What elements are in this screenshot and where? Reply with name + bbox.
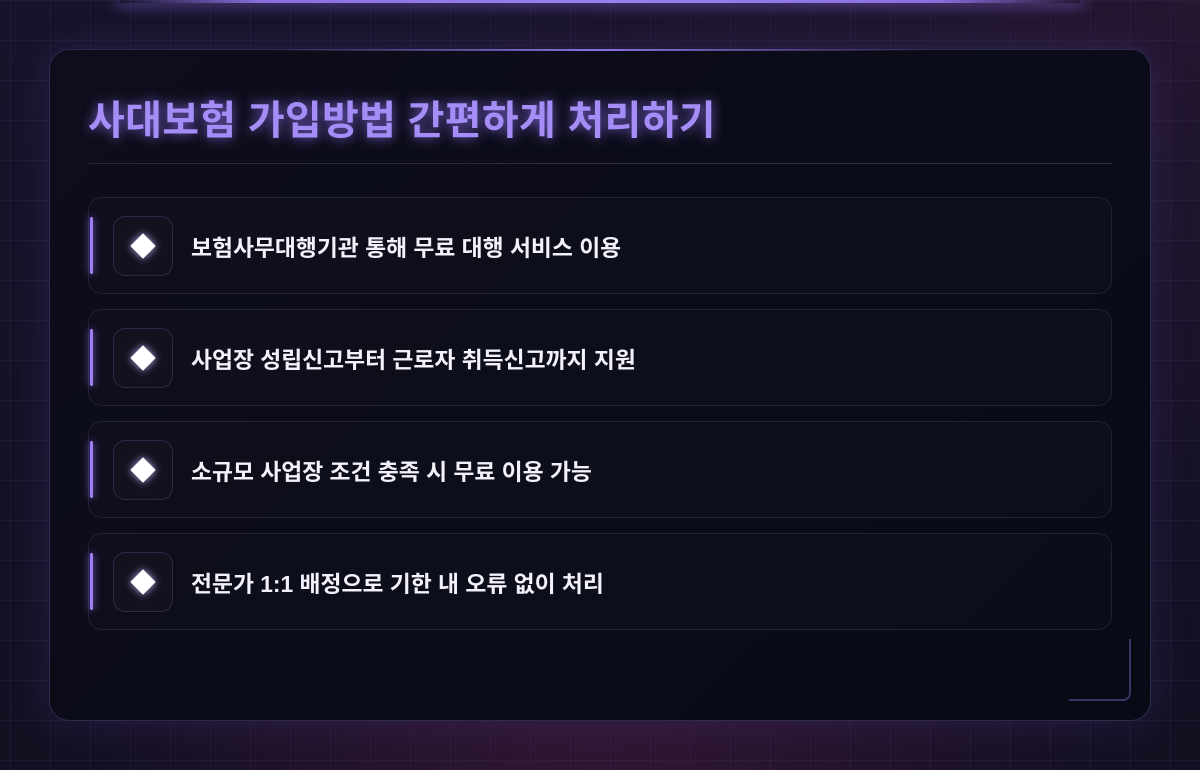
top glow line bbox=[120, 0, 1080, 3]
item 2 bbox=[88, 309, 1112, 406]
title: 사대보험 가입방법 간편하게 처리하기 bbox=[88, 99, 716, 143]
item 3: 소규모 사업장 조건 충족 시 무료 이용 가능 bbox=[191, 459, 592, 485]
item 4 bbox=[88, 533, 1112, 630]
corner decoration bbox=[1069, 639, 1131, 701]
item 2: 사업장 성립신고부터 근로자 취득신고까지 지원 bbox=[191, 347, 636, 373]
item 4: 전문가 1:1 배정으로 기한 내 오류 없이 처리 bbox=[191, 571, 604, 597]
item 1 bbox=[88, 197, 1112, 294]
item 1: 보험사무대행기관 통해 무료 대행 서비스 이용 bbox=[191, 235, 621, 261]
item 3 bbox=[88, 421, 1112, 518]
